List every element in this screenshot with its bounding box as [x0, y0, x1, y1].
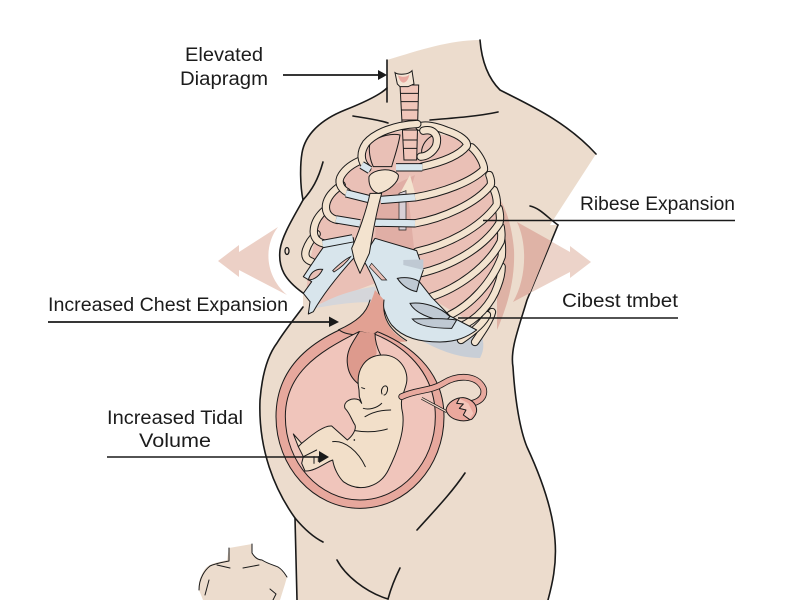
amniotic cavity: [285, 332, 435, 500]
small torso thumbnail: [199, 544, 287, 600]
cervical canal: [347, 332, 377, 385]
uterine wall: [276, 330, 444, 508]
canal outlines: [347, 332, 381, 385]
uterus and fetus: [276, 290, 484, 508]
label: Increased Chest Expansion: [48, 295, 339, 327]
lungs: [307, 131, 502, 323]
cervical stem: [337, 290, 407, 343]
fallopian tube and ovary: [402, 377, 484, 421]
label: Cibest tmbet: Cibest tmbet: [562, 291, 679, 312]
label: Elevated Diapragm: Diapragm: [180, 69, 268, 90]
label: Ribese Expansion: Ribese Expansion: [580, 194, 735, 215]
shadow beneath the rib cage: [383, 307, 483, 358]
costal cartilage: [303, 165, 477, 342]
expansion bands over the body: [497, 195, 551, 330]
label: Elevated Diapragm: [180, 45, 387, 90]
label: Increased Chest Expansion: Increased Chest Expansion: [48, 295, 288, 316]
expansion arrow: right: [513, 222, 591, 302]
mediastinum: [375, 175, 423, 270]
diaphragm shadow: [313, 287, 382, 308]
fetus: [293, 355, 407, 488]
right ribs: [415, 126, 502, 342]
expansion arrow: left: [218, 227, 287, 295]
rib cage (coordinates in 3x zoom space): [303, 71, 502, 342]
sternum: [352, 170, 398, 273]
label: Increased Tidal Volume: [107, 408, 329, 463]
label: Elevated Diapragm: Elevated: [185, 45, 263, 66]
label: Increased Tidal Volume: Increased Tidal: [107, 408, 243, 429]
trachea: [395, 71, 419, 160]
label: Increased Tidal Volume: Volume: [139, 431, 211, 452]
body silhouette: [260, 40, 596, 600]
left ribs: [305, 124, 417, 262]
right upper lung lobe: [422, 135, 437, 158]
left upper lung lobe: [369, 134, 400, 167]
stem outlines: [338, 300, 407, 341]
